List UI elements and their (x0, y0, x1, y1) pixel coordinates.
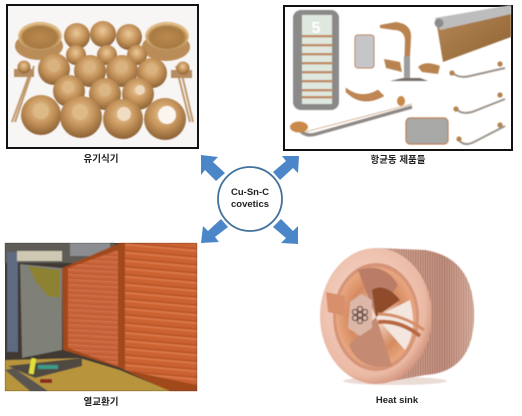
heading: heat exchanger caption: 열교환기 (84, 396, 118, 408)
panel: antibacterial copper products: 5 (312, 20, 321, 37)
center circle: Cu-Sn-C covetics: Cu-Sn-C (231, 187, 269, 198)
heading: brassware caption: 유기식기 (84, 153, 118, 165)
heading: heat sink caption: Heat sink (376, 395, 419, 406)
arrow: to heat exchanger (201, 219, 228, 243)
illustration: copper heat sink (320, 248, 474, 385)
arrow: to brassware (201, 155, 225, 181)
panel: brassware tableware (7, 5, 198, 148)
panel: heat exchanger photo (5, 243, 197, 391)
heading: antibacterial products caption: 항균동 제품들 (370, 154, 426, 166)
center circle: Cu-Sn-C covetics (218, 167, 282, 231)
arrow: to heat sink (273, 219, 298, 244)
center circle: Cu-Sn-C covetics: covetics (231, 199, 269, 210)
panel: antibacterial copper products (284, 5, 512, 150)
arrow: to copper products (273, 156, 299, 180)
